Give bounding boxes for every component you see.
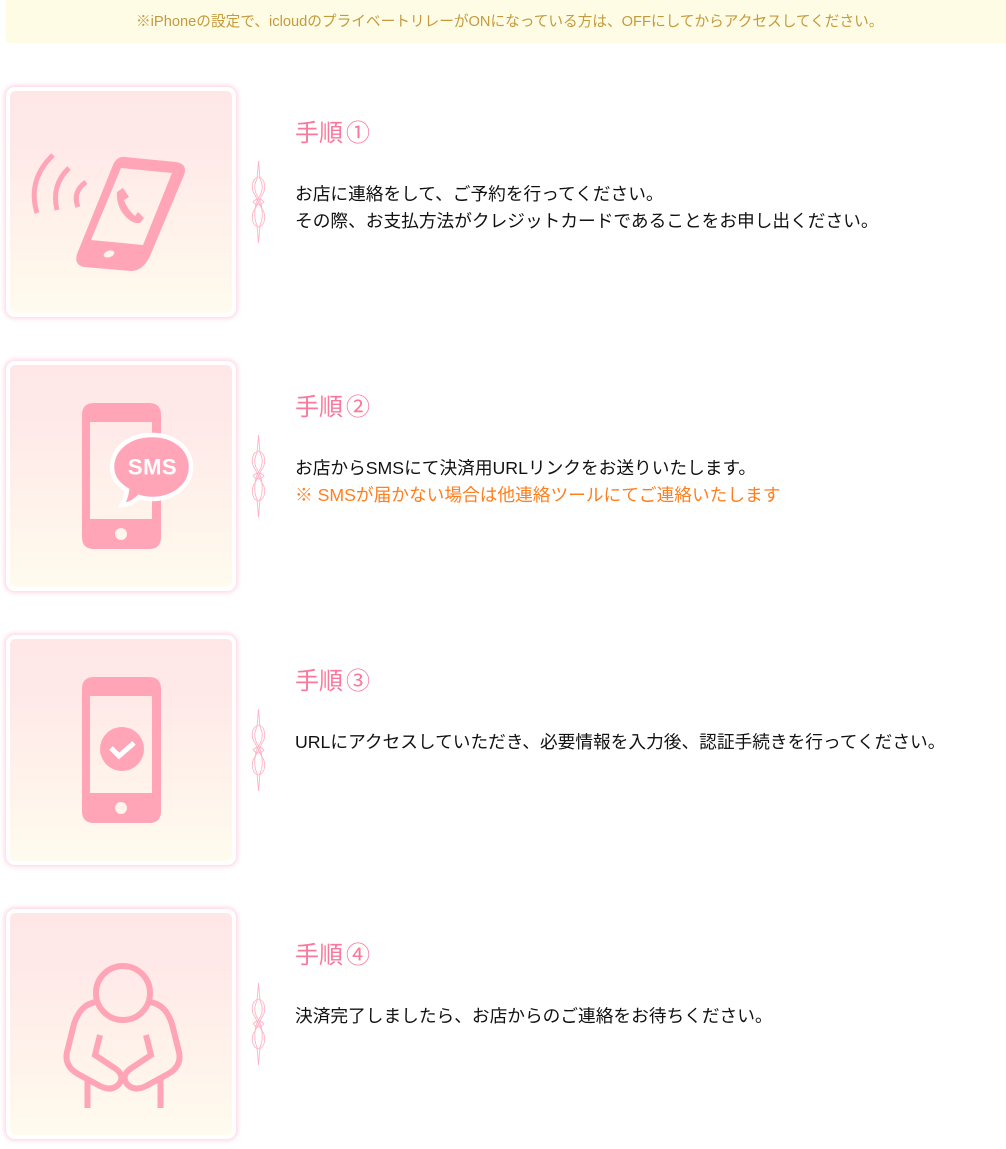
- ornament: [252, 709, 266, 791]
- step 2 panel: [2, 358, 780, 594]
- SMS label: SMS: [128, 454, 177, 480]
- step 2 text: ※ SMSが届かない場合は他連絡ツールにてご連絡いたします: [295, 485, 780, 505]
- step 3 text: URLにアクセスしていただき、必要情報を入力後、認証手続きを行ってください。: [295, 732, 945, 752]
- phone: [76, 157, 185, 271]
- check badge: [100, 727, 144, 771]
- ornament: [252, 435, 266, 517]
- icon card: bowing person: [6, 909, 236, 1139]
- left arm: [66, 1002, 121, 1089]
- legs: [88, 1080, 160, 1108]
- step 2 heading: 手順②: [295, 394, 370, 421]
- step 4 panel: [2, 906, 773, 1142]
- step 1 panel: [2, 84, 879, 320]
- step 1 text: お店に連絡をして、ご予約を行ってください。: [295, 184, 664, 204]
- step 2 text: [295, 458, 780, 505]
- head: [96, 966, 150, 1020]
- icon card: phone check: [6, 635, 236, 865]
- step 1 text: その際、お支払方法がクレジットカードであることをお申し出ください。: [295, 211, 879, 231]
- phone: [82, 403, 161, 549]
- step 1 text: [295, 184, 879, 231]
- speech bubble: [112, 435, 191, 505]
- notice banner: ※iPhoneの設定で、icloudのプライベートリレーがONになっている方は、OFFにしてからアクセスしてください。: [136, 14, 883, 30]
- ornament: [252, 161, 266, 243]
- step 3 panel: [2, 632, 945, 868]
- step 4 heading: 手順④: [295, 942, 370, 969]
- signal waves: [34, 155, 53, 213]
- handset: [117, 188, 144, 223]
- step 1 heading: 手順①: [295, 120, 370, 147]
- icon card: phone calling: [6, 87, 236, 317]
- phone: [82, 677, 161, 823]
- step 4 text: 決済完了しましたら、お店からのご連絡をお待ちください。: [295, 1006, 773, 1026]
- ornament: [252, 983, 266, 1065]
- right arm: [125, 1002, 180, 1089]
- notice banner: [6, 0, 1006, 43]
- icon card: SMS phone: [6, 361, 236, 591]
- step 3 heading: 手順③: [295, 668, 370, 695]
- step 2 text: お店からSMSにて決済用URLリンクをお送りいたします。: [295, 458, 756, 478]
